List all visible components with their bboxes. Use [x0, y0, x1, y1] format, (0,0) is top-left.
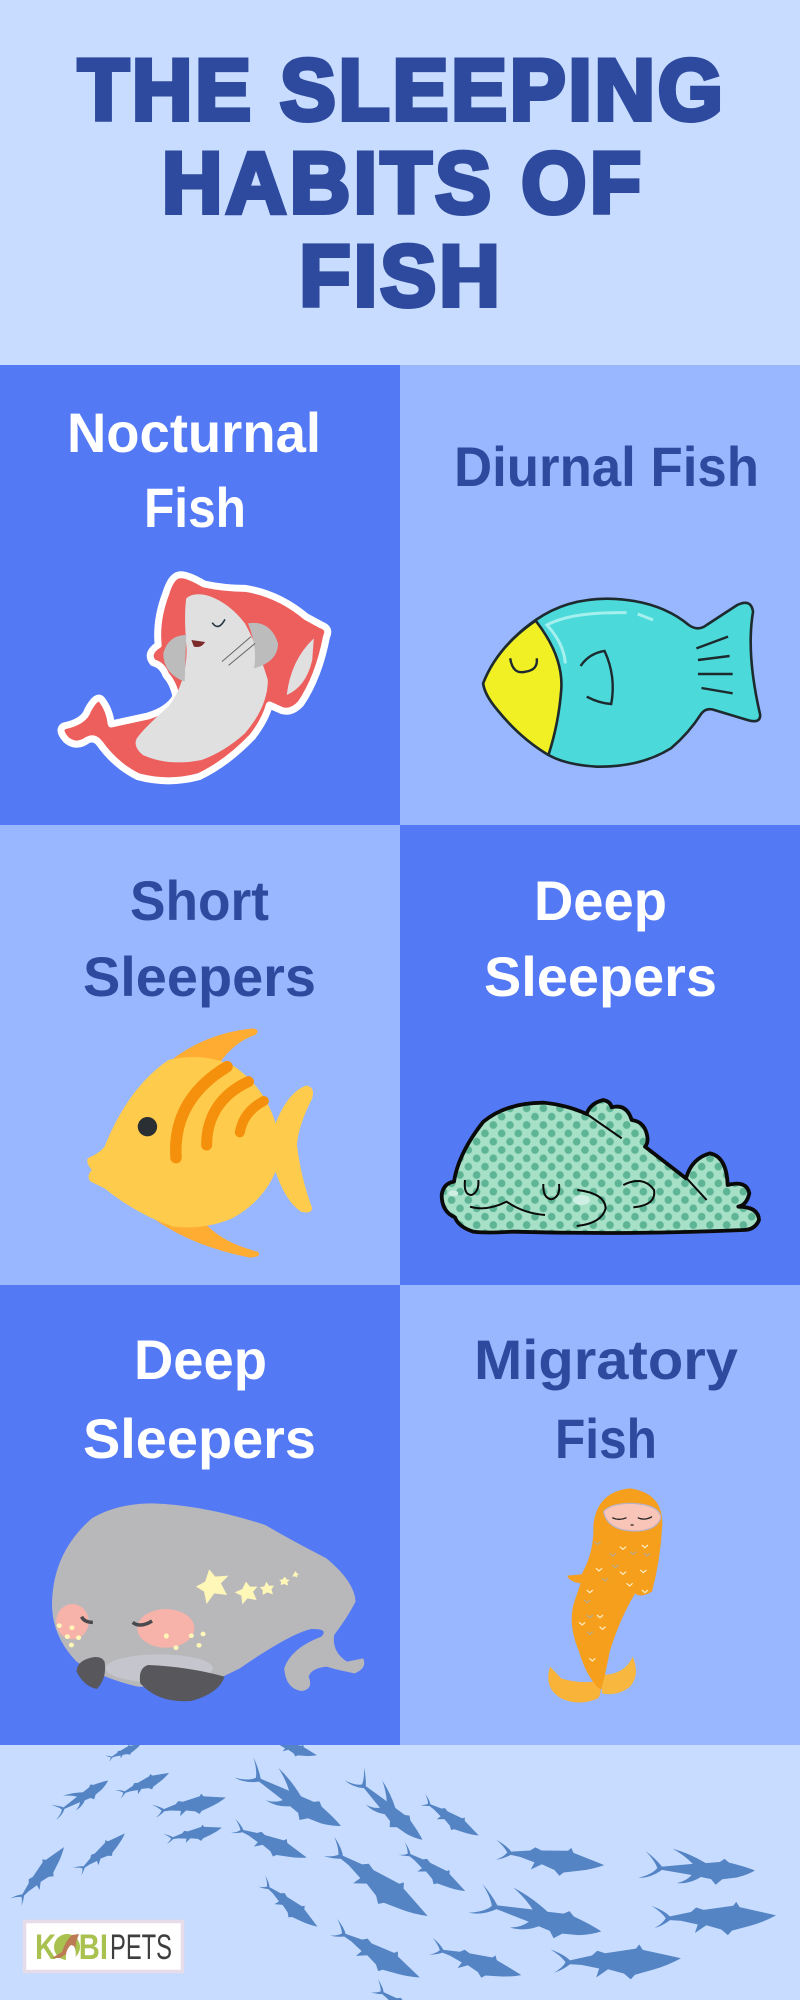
icon: orange mermaid fish	[548, 1488, 662, 1702]
logo: KobiPets: KOBI	[35, 1928, 108, 1967]
panel: deep sleepers right	[400, 825, 800, 1285]
heading: nocturnal fish: Fish	[144, 476, 246, 539]
title: HABITS OF	[162, 134, 645, 231]
heading: deep sleepers right: Sleepers	[484, 945, 717, 1008]
logo: KobiPets	[24, 1922, 182, 1972]
heading: short sleepers	[83, 869, 316, 1008]
heading: migratory fish: Migratory	[474, 1328, 738, 1391]
heading: nocturnal fish	[67, 401, 321, 539]
panel: deep sleepers left	[0, 1285, 400, 1745]
heading: deep sleepers left: Deep	[134, 1328, 267, 1391]
heading: diurnal fish: Diurnal Fish	[454, 435, 759, 498]
heading: deep sleepers right: Deep	[534, 869, 667, 932]
panel: migratory fish	[400, 1285, 800, 1745]
school of tuna silhouettes	[10, 1734, 777, 2000]
heading: short sleepers: Sleepers	[83, 945, 316, 1008]
icon: yellow angelfish	[87, 1028, 313, 1258]
icon: dog and cat in logo	[52, 1934, 80, 1960]
heading: migratory fish: Fish	[555, 1407, 657, 1470]
icon: sleeping shark in red sleeping bag	[61, 575, 328, 781]
icon: grey sleeping whale	[52, 1503, 364, 1701]
logo: KobiPets: PETS	[110, 1928, 172, 1967]
heading: migratory fish	[474, 1328, 738, 1470]
title: FISH	[300, 227, 503, 324]
icon: teal fish with yellow face	[483, 599, 760, 767]
panel: nocturnal fish	[0, 365, 400, 825]
panel: short sleepers	[0, 825, 400, 1285]
panel: diurnal fish	[400, 365, 800, 825]
heading: nocturnal fish: Nocturnal	[67, 401, 321, 464]
title: THE SLEEPING	[78, 41, 726, 138]
heading: deep sleepers left: Sleepers	[83, 1407, 316, 1470]
title	[78, 41, 726, 324]
icon: green polka dot fish sleeping	[442, 1100, 759, 1233]
heading: deep sleepers right	[484, 869, 717, 1008]
heading: short sleepers: Short	[130, 869, 269, 932]
heading: deep sleepers left	[83, 1328, 316, 1470]
